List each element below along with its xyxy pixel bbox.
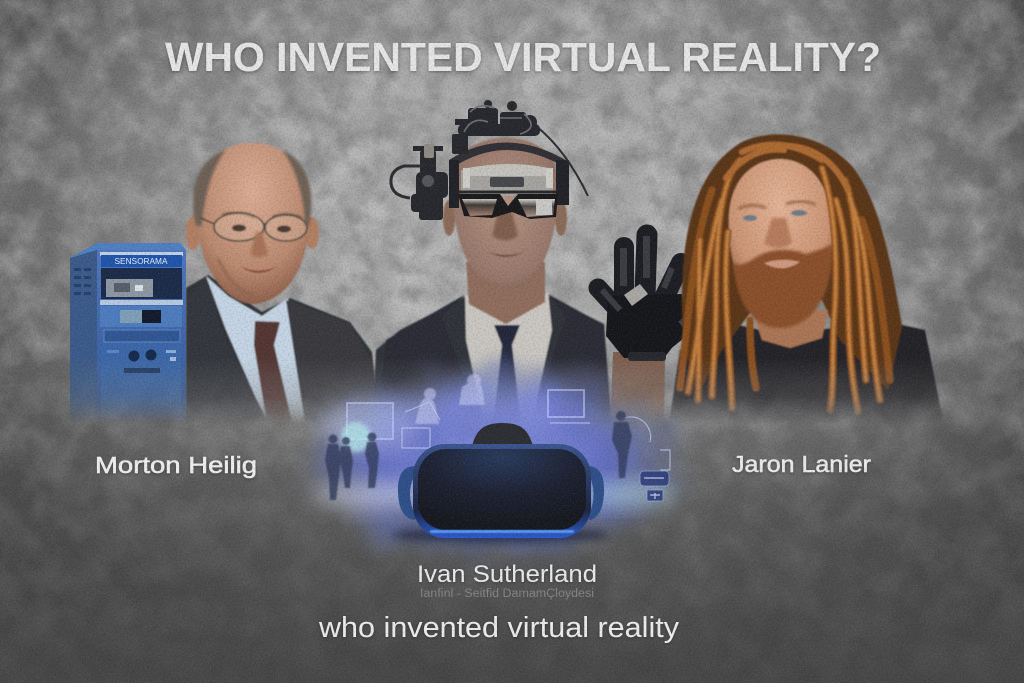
back hair (682, 134, 902, 390)
name: Jaron Lanier: Jaron Lanier (732, 451, 871, 477)
panel: Morton Heilig with Sensorama (70, 143, 380, 430)
name: Morton Heilig: Morton Heilig (95, 452, 257, 478)
tech on top (452, 100, 540, 154)
forearm (611, 352, 665, 416)
side straps (398, 466, 418, 520)
black t-shirt (670, 324, 942, 420)
suit and shirt (374, 292, 610, 416)
holographic panels (347, 390, 670, 470)
vents (74, 268, 91, 295)
portraits fading into fog (70, 100, 945, 430)
neck (752, 310, 828, 348)
faint subtitle: Ianfinl - Seitfid DamamÇloydesi (420, 588, 594, 600)
beard (733, 244, 832, 328)
head (443, 138, 567, 324)
panel: Ivan Sutherland with head-mounted display (372, 100, 703, 430)
label: Sensorama: SENSORAMA (114, 256, 168, 266)
thin side hair (193, 150, 311, 226)
glove hand (598, 235, 703, 430)
headset rig (391, 100, 588, 220)
face (728, 158, 832, 267)
goggles (458, 194, 558, 219)
caption: who invented virtual reality (318, 612, 680, 644)
dreadlocks (680, 145, 890, 412)
machine: Sensorama cabinet (70, 243, 186, 430)
holographic people (325, 411, 632, 500)
portrait: Morton Heilig (186, 143, 380, 430)
icon chips (640, 471, 669, 501)
VR headset (392, 423, 608, 543)
name: Ivan Sutherland: Ivan Sutherland (417, 561, 597, 588)
side cluster (411, 146, 448, 220)
panel: Jaron Lanier (668, 134, 945, 430)
eyebrows (222, 212, 302, 218)
title: WHO INVENTED VIRTUAL REALITY? (165, 34, 881, 80)
front fabric (418, 449, 586, 530)
glasses (201, 213, 307, 241)
glowing virtual world (292, 358, 702, 566)
shell (413, 444, 591, 538)
top strap (472, 423, 533, 446)
eyes (743, 215, 757, 221)
